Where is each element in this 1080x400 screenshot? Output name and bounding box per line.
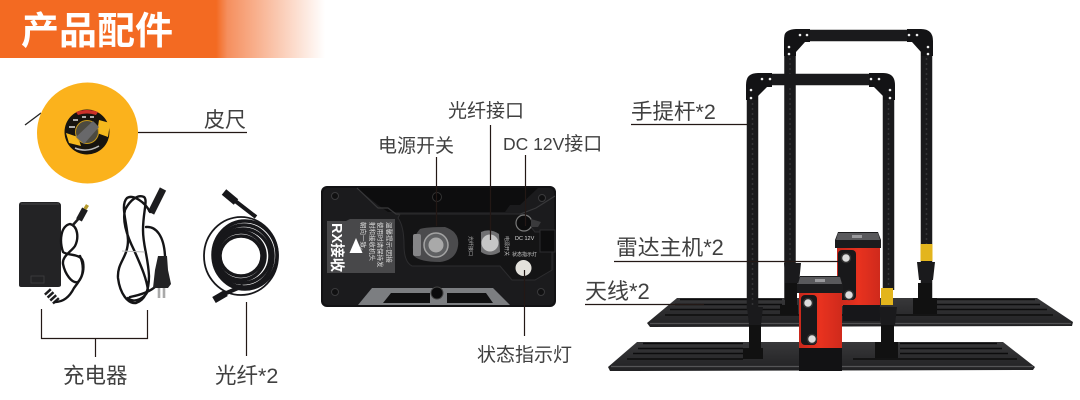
- back radar set: [647, 29, 1073, 327]
- label: DC 12V接口: DC 12V接口: [503, 133, 602, 155]
- label sticker: 使用时请保持发: [376, 222, 385, 268]
- label: 皮尺: 皮尺: [204, 109, 246, 132]
- back handle: [780, 29, 937, 315]
- label: 手提杆*2: 手提杆*2: [631, 100, 716, 124]
- label: 光纤*2: 光纤*2: [215, 364, 278, 388]
- label: 光纤接口: 光纤接口: [448, 100, 524, 122]
- back antenna plate: [647, 298, 1073, 327]
- label: 电源开关: 电源开关: [378, 135, 454, 157]
- icon: status light: 状态指示灯: [512, 251, 537, 258]
- icon: fibre port: 光纤接口: [467, 236, 474, 256]
- label sticker: 温馨提示:因接: [385, 222, 394, 263]
- label sticker: [327, 219, 395, 273]
- label: DC 12V接口: [503, 133, 602, 226]
- label: 天线*2: 天线*2: [585, 279, 650, 304]
- icon: power adapter: [19, 202, 88, 302]
- front radar unit: [797, 276, 843, 371]
- front handle: [743, 73, 898, 359]
- label: 状态指示灯: 状态指示灯: [477, 344, 572, 366]
- label: 皮尺: [138, 109, 247, 132]
- label: 雷达主机*2: 雷达主机*2: [616, 235, 724, 260]
- label sticker: 射和接收机头: [368, 222, 377, 262]
- icon: DC port: DC 12V: [515, 236, 535, 242]
- back radar unit: [835, 232, 881, 321]
- title: 产品配件: [21, 11, 173, 53]
- panel: receiver device: [321, 186, 556, 307]
- label: 状态指示灯: [477, 270, 572, 366]
- icon: power switch: [413, 227, 458, 262]
- label: 光纤接口: [448, 100, 524, 240]
- heading band: [0, 0, 325, 58]
- front radar set: [608, 73, 1035, 371]
- label sticker: 朝向一致。: [359, 222, 368, 254]
- label: 电源开关: [378, 135, 454, 226]
- front antenna plate: [608, 342, 1035, 371]
- label: 天线*2: [585, 279, 704, 304]
- icon: status light: [512, 251, 537, 276]
- icon: fibre coil: [204, 192, 278, 300]
- icon: fibre port: 电源开关: [503, 236, 510, 256]
- icon: DC port: [515, 215, 541, 242]
- label sticker: RX接收: [328, 223, 345, 273]
- label: 光纤*2: [215, 302, 278, 388]
- label: 充电器: 充电器: [63, 364, 128, 388]
- label: 充电器: [42, 309, 148, 388]
- icon: power cord with plug: [118, 189, 171, 303]
- icon: fibre port: [467, 230, 510, 256]
- icon: tape measure: [25, 82, 138, 184]
